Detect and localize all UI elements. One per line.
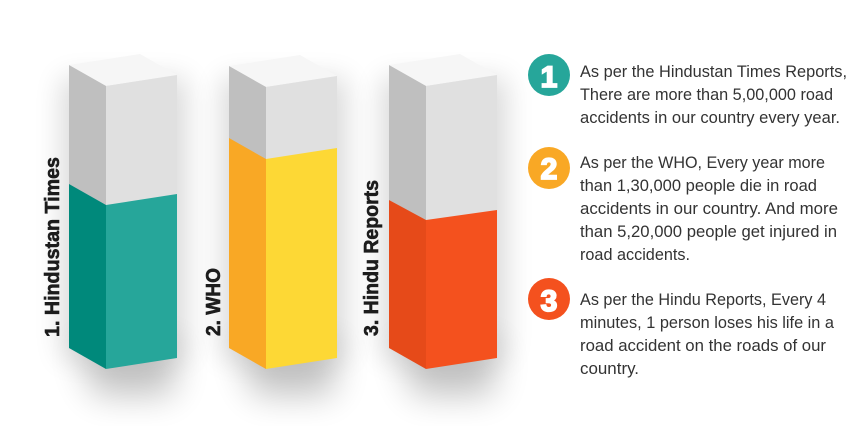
- column 3 filled front face: [426, 210, 497, 369]
- text block 3: minutes, 1 person loses his life in a: [580, 314, 835, 332]
- badge 2: [528, 147, 570, 189]
- text block 1: [580, 63, 847, 127]
- text block 1: accidents in our country every year.: [580, 109, 840, 127]
- text block 2: accidents in our country. And more: [580, 200, 838, 218]
- column 2 shadow: [222, 78, 346, 395]
- text block 2: road accidents.: [580, 246, 690, 264]
- column 3 shadow: [382, 78, 506, 395]
- text block 1: There are more than 5,00,000 road: [580, 86, 833, 104]
- text block 2: [580, 154, 838, 264]
- column label: Hindustan Times: 1. Hindustan Times: [42, 157, 64, 337]
- column 3 empty left face: [389, 65, 426, 221]
- column label: WHO: 2. WHO: [203, 268, 225, 336]
- column 1 top face: [69, 54, 177, 86]
- column 3 filled left face: [389, 200, 426, 369]
- badge 2: 2: [541, 153, 557, 186]
- text block 3: As per the Hindu Reports, Every 4: [580, 291, 826, 309]
- badge 1: [528, 54, 570, 96]
- text block 2: than 1,30,000 people die in road: [580, 177, 817, 195]
- column 1 shadow: [62, 78, 186, 395]
- column 3 empty front face: [426, 75, 497, 221]
- text block 3: country.: [580, 360, 639, 378]
- column 2 filled left face: [229, 138, 266, 369]
- column 1 empty left face: [69, 65, 106, 206]
- column 1 empty front face: [106, 75, 177, 206]
- column 2 top face: [229, 55, 337, 87]
- column 3 top face: [389, 54, 497, 86]
- column 2 empty front face: [266, 76, 337, 160]
- column 2 filled front face: [266, 148, 337, 369]
- text block 2: As per the WHO, Every year more: [580, 154, 825, 172]
- column 2: WHO: [222, 55, 346, 395]
- column label: Hindu Reports: 3. Hindu Reports: [361, 180, 383, 336]
- text block 3: road accident on the roads of our: [580, 337, 826, 355]
- badge 3: 3: [541, 285, 557, 318]
- column 3: Hindu Reports: [382, 54, 506, 395]
- column 1 filled front face: [106, 194, 177, 369]
- text block 1: As per the Hindustan Times Reports,: [580, 63, 847, 81]
- badge 1: 1: [541, 61, 557, 94]
- text block 3: [580, 291, 835, 378]
- column 2 empty left face: [229, 66, 266, 160]
- column 1 filled left face: [69, 184, 106, 369]
- column 1: Hindustan Times: [62, 54, 186, 395]
- badge 3: [528, 278, 570, 320]
- text block 2: than 5,20,000 people get injured in: [580, 223, 837, 241]
